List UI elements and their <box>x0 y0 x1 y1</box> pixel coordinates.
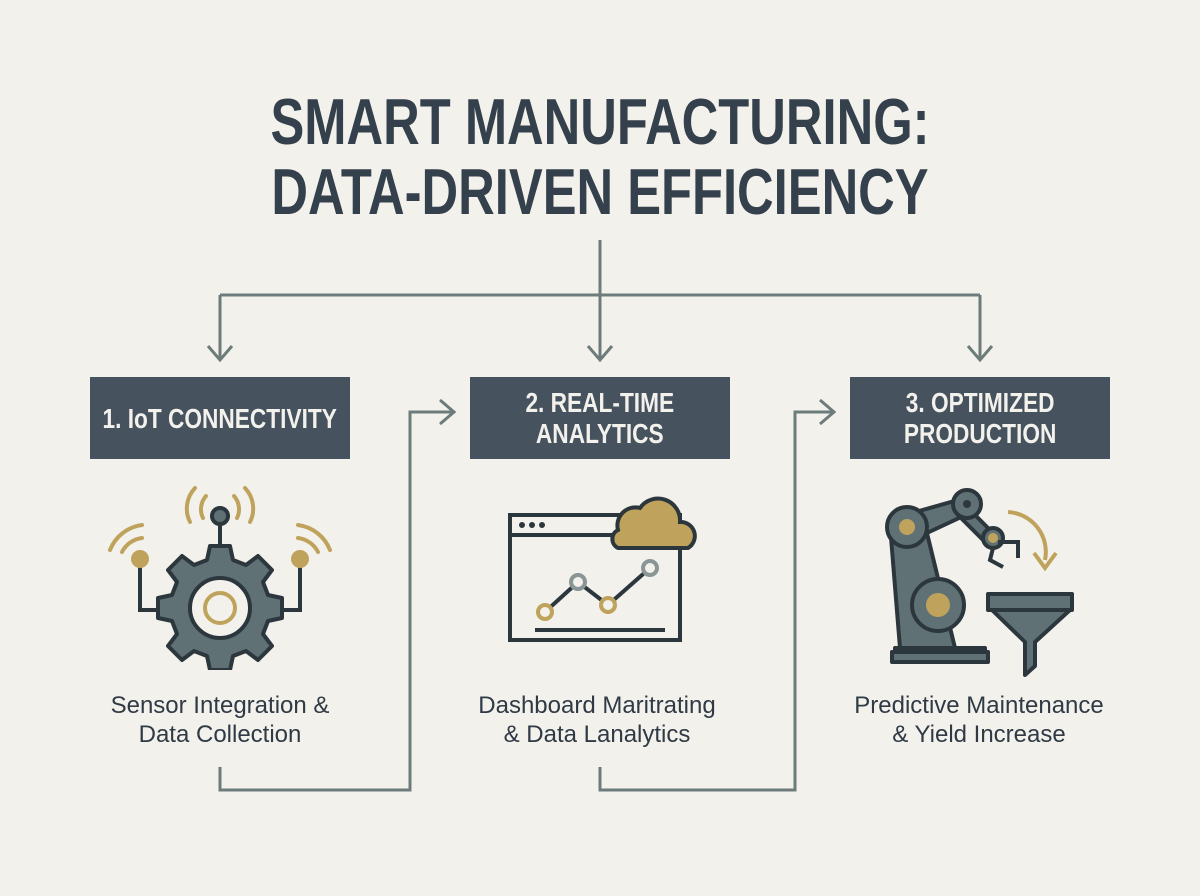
title <box>270 85 930 228</box>
box 3 <box>850 377 1110 459</box>
icon: gear with sensors <box>108 486 332 670</box>
title: DATA-DRIVEN EFFICIENCY <box>271 155 929 228</box>
caption 3 <box>854 692 1104 748</box>
box 1: 1. IoT CONNECTIVITY <box>103 402 337 434</box>
caption 1 <box>111 692 329 748</box>
box 3: PRODUCTION <box>904 418 1056 449</box>
box 3: 3. OPTIMIZED <box>906 387 1054 418</box>
caption 1: Data Collection <box>139 721 301 748</box>
icon: robot arm and funnel <box>885 488 1074 677</box>
caption 3: & Yield Increase <box>892 721 1066 748</box>
arrow: step1 to step2 <box>220 400 454 790</box>
caption 1: Sensor Integration & <box>111 692 329 719</box>
arrow: step2 to step3 <box>600 400 834 790</box>
box 2: 2. REAL-TIME <box>526 387 674 418</box>
box 1 <box>90 377 350 459</box>
box 2: ANALYTICS <box>536 418 664 449</box>
caption 2: & Data Lanalytics <box>504 721 690 748</box>
arrow: top tree <box>208 240 992 360</box>
box 2 <box>470 377 730 459</box>
caption 3: Predictive Maintenance <box>854 692 1104 719</box>
title: SMART MANUFACTURING: <box>270 85 930 158</box>
caption 2: Dashboard Maritrating <box>478 692 716 719</box>
icon: dashboard with cloud <box>508 496 697 642</box>
caption 2 <box>478 692 716 748</box>
